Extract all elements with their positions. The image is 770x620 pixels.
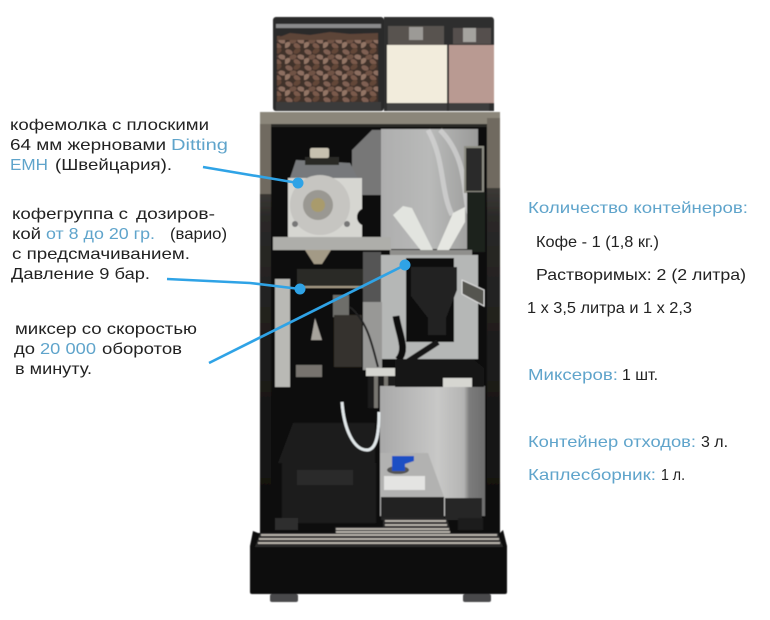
specs: drip tray: 1 л. bbox=[661, 467, 685, 484]
pointer: brew group bbox=[167, 279, 306, 294]
black shelf bbox=[395, 359, 484, 387]
brew group bbox=[275, 252, 382, 406]
text: mixer: оборотов bbox=[102, 341, 182, 358]
machine body bbox=[260, 112, 500, 537]
specs: drip tray: Каплесборник: bbox=[528, 467, 656, 484]
drain box with blue knob bbox=[380, 453, 444, 520]
text: mixer: в минуту. bbox=[15, 361, 92, 378]
text: brew group: с предсмачиванием. bbox=[12, 246, 190, 263]
specs: mixers bbox=[528, 367, 658, 384]
specs: mixers: Миксеров: bbox=[528, 367, 618, 384]
lower service panel bbox=[380, 386, 485, 520]
white tube bbox=[342, 402, 379, 450]
text: grinder: (Швейцария). bbox=[55, 157, 172, 174]
specs: drip tray bbox=[528, 467, 685, 484]
specs: waste container: 3 л. bbox=[701, 434, 728, 451]
text: mixer: 20 000 bbox=[40, 341, 96, 358]
text: grinder bbox=[10, 117, 228, 174]
specs: containers bbox=[527, 200, 748, 317]
specs: containers: 1 x 3,5 литра и 1 x 2,3 bbox=[527, 300, 692, 317]
text: mixer: миксер со скоростью bbox=[15, 321, 197, 338]
bean hopper bbox=[273, 17, 384, 111]
specs: mixers: 1 шт. bbox=[622, 367, 658, 384]
text: grinder: кофемолка с плоскими bbox=[10, 117, 209, 134]
text: brew group: кой bbox=[12, 226, 41, 243]
pink powder hopper bbox=[449, 17, 494, 111]
white powder hopper bbox=[384, 17, 449, 111]
specs: containers: Кофе - 1 (1,8 кг.) bbox=[536, 234, 659, 251]
text: mixer bbox=[14, 321, 197, 378]
text: brew group: кофегруппа с bbox=[12, 206, 128, 223]
coffee grinder bbox=[273, 148, 391, 264]
specs: containers: Количество контейнеров: bbox=[528, 200, 748, 217]
specs: waste container: Контейнер отходов: bbox=[528, 434, 696, 451]
text: brew group: от 8 до 20 гр. bbox=[46, 226, 155, 243]
text: brew group: дозиров- bbox=[136, 206, 215, 223]
rear panel with hoses bbox=[352, 129, 485, 252]
coffee machine photo bbox=[250, 17, 507, 602]
specs: containers: Растворимых: 2 (2 литра) bbox=[536, 267, 746, 284]
valves bbox=[366, 368, 397, 412]
mixer assembly panel bbox=[381, 255, 484, 368]
pointer: grinder bbox=[203, 167, 304, 188]
pointer: mixer bbox=[209, 260, 410, 363]
waste container bbox=[271, 408, 483, 530]
text: brew group bbox=[11, 206, 227, 283]
text: brew group: Давление 9 бар. bbox=[11, 266, 150, 283]
drip tray bbox=[250, 518, 507, 594]
mixer funnels bbox=[390, 206, 472, 255]
text: mixer: до bbox=[14, 341, 35, 358]
text: grinder: Ditting bbox=[171, 137, 228, 154]
text: grinder: EMH bbox=[10, 157, 48, 174]
text: grinder: 64 мм жерновами bbox=[10, 137, 166, 154]
machine feet bbox=[270, 594, 491, 602]
text: brew group: (варио) bbox=[170, 226, 227, 243]
